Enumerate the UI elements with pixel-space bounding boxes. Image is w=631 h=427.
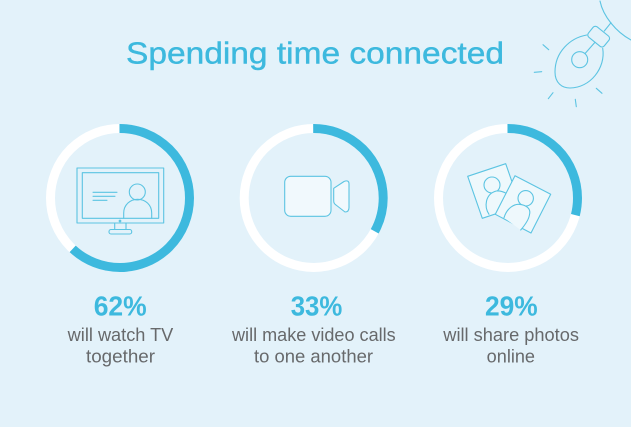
label: will make video calls to one another: to one another: [254, 346, 373, 366]
label: will share photos online: online: [487, 346, 535, 366]
donut chart: 62%: [50, 128, 190, 268]
icon: monitor with presenter: [77, 168, 164, 234]
panel: watch TV: [50, 128, 190, 366]
stat: 29%: 29%: [485, 291, 538, 322]
stat: 62%: 62%: [94, 291, 147, 322]
label: will share photos online: will share photos: [442, 325, 579, 345]
label: will watch TV together: [67, 325, 173, 366]
icon: two photos: [468, 164, 551, 233]
label: will watch TV together: together: [86, 346, 155, 366]
icon: light bulb: [534, 1, 631, 107]
title: Spending time connected: [126, 36, 504, 70]
panel: share photos: [438, 128, 579, 366]
label: will share photos online: [442, 325, 579, 366]
panel: video calls: [231, 128, 396, 366]
label: will watch TV together: will watch TV: [67, 325, 173, 345]
donut chart: 29%: [438, 128, 578, 268]
label: will make video calls to one another: [231, 325, 396, 366]
stat: 33%: 33%: [291, 291, 342, 322]
donut chart: 33%: [244, 128, 383, 268]
icon: video camera: [285, 176, 349, 216]
label: will make video calls to one another: will make video calls: [231, 325, 396, 345]
